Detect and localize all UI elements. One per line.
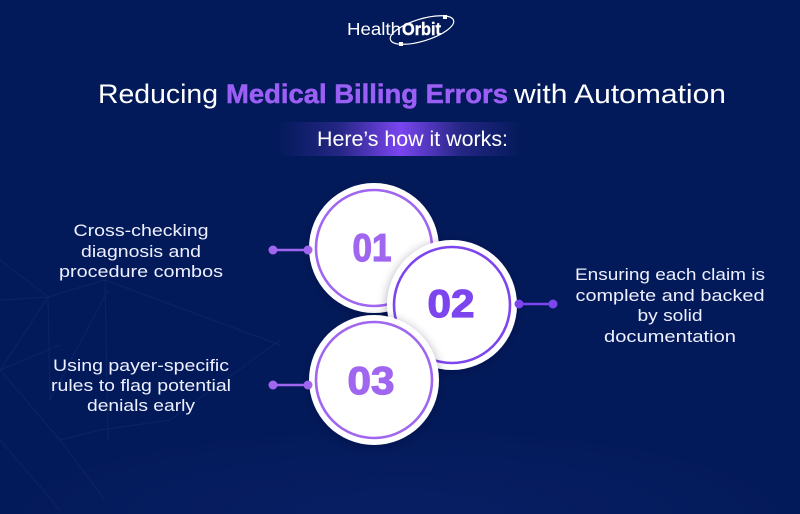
circle 03: 03 [348, 360, 394, 403]
step 02 text: Ensuring each claim is [575, 266, 765, 284]
title: with Automation [513, 79, 726, 109]
step 03 text [51, 357, 231, 415]
step 01 text: diagnosis and [81, 243, 201, 261]
title: Reducing [98, 79, 218, 109]
connector 02 [514, 300, 558, 308]
step 02 text: by solid [638, 307, 702, 325]
step 03 text: denials early [87, 397, 196, 415]
circle 01 [309, 183, 439, 313]
circle 02: 02 [428, 283, 474, 326]
logo [347, 10, 457, 50]
circle 02 [387, 240, 517, 370]
logo: Orbit [402, 19, 441, 39]
logo: Health [347, 19, 401, 39]
step 03 text: rules to flag potential [51, 377, 231, 395]
circle 03 [309, 315, 439, 445]
subtitle band: Here’s how it works: [317, 128, 508, 151]
step 01 text: procedure combos [59, 263, 223, 281]
step 02 text: complete and backed [576, 287, 764, 305]
circle 01: 01 [352, 227, 392, 270]
step 01 text [59, 222, 223, 281]
step 01 text: Cross-checking [74, 222, 208, 240]
title: Medical Billing Errors [226, 79, 508, 109]
subtitle band [278, 122, 522, 156]
step 02 text: documentation [604, 328, 736, 346]
connector 03 [268, 380, 312, 390]
title [98, 79, 726, 109]
connector 01 [268, 246, 312, 254]
step 03 text: Using payer-specific [53, 357, 229, 375]
step 02 text [575, 266, 765, 346]
